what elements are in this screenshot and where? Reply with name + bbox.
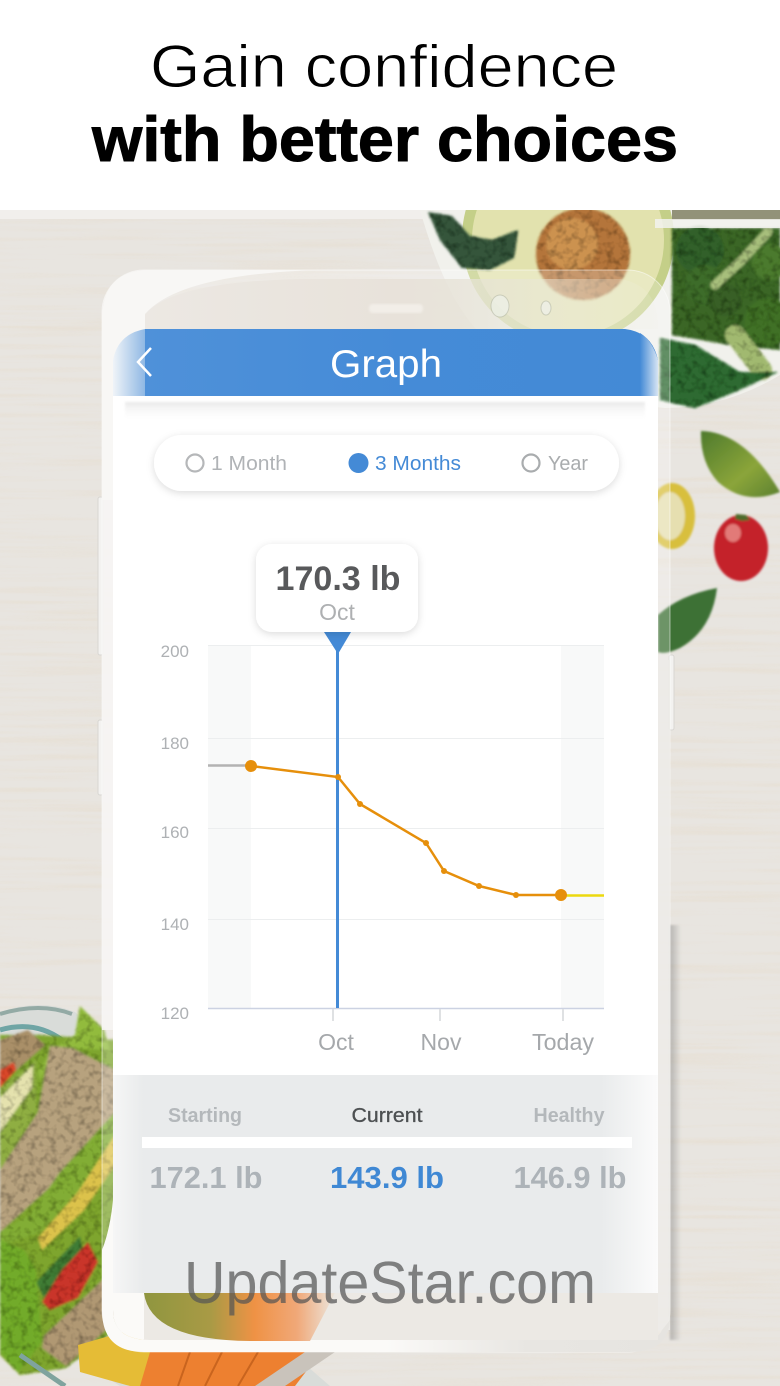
start weight segment [208, 764, 251, 767]
stat: starting [150, 1105, 262, 1195]
divider bar [142, 1137, 632, 1148]
chart side bands [208, 645, 604, 1009]
stat: current [330, 1105, 444, 1195]
watermark: UpdateStar.com [184, 1250, 596, 1316]
stat: starting: Starting [168, 1105, 242, 1127]
option: 1 Month: 1 Month [211, 453, 287, 475]
option: Year: Year [548, 453, 588, 475]
y axis labels: 180 [161, 734, 189, 753]
title: with better choices [91, 105, 678, 175]
stat: starting: 172.1 lb [150, 1160, 262, 1195]
y axis labels: 120 [161, 1004, 189, 1023]
food: yellow tomato [649, 483, 695, 549]
water drops [491, 295, 551, 317]
header title: Graph [330, 343, 442, 386]
time range selector [154, 435, 619, 491]
line chart [161, 632, 604, 1055]
y axis labels [161, 642, 189, 1023]
header band [0, 0, 780, 210]
x axis [208, 1008, 604, 1010]
option: Year [522, 453, 588, 475]
y axis labels: 200 [161, 642, 189, 661]
food: red tomato [714, 514, 768, 581]
goal segment [561, 894, 604, 897]
stat: current: 143.9 lb [330, 1160, 444, 1195]
y axis labels: 160 [161, 823, 189, 842]
x axis labels [318, 1029, 595, 1055]
food showing through phone bottom [144, 1293, 335, 1341]
option: 3 Months: 3 Months [375, 453, 461, 475]
x axis labels: Nov [421, 1029, 462, 1055]
title [91, 33, 678, 175]
selected date marker [324, 632, 351, 1008]
food: salad bowl top right [420, 132, 780, 408]
phone drop shadow [670, 925, 681, 1340]
phone top bezel [145, 279, 658, 329]
back arrow [138, 348, 151, 376]
tooltip: 170.3 lb [276, 560, 400, 598]
y axis labels: 140 [161, 915, 189, 934]
food: green leaf [658, 588, 717, 653]
stat: healthy [514, 1105, 626, 1195]
stat: healthy: 146.9 lb [514, 1160, 626, 1195]
tooltip: Oct [319, 599, 355, 625]
food: basil leaf [701, 431, 780, 497]
screen background [113, 396, 658, 1076]
header bar [113, 329, 658, 422]
x axis labels: Oct [318, 1029, 354, 1055]
tooltip [256, 544, 418, 632]
weight line [245, 760, 567, 901]
phone body [102, 270, 670, 1352]
speaker slot [369, 304, 423, 313]
stat: current: Current [352, 1105, 423, 1127]
stat: healthy: Healthy [534, 1105, 605, 1127]
stats panel [113, 1075, 658, 1341]
title: Gain confidence [150, 33, 618, 100]
x axis labels: Today [532, 1029, 595, 1055]
phone side buttons [98, 497, 674, 795]
food: sandwich bottom left [0, 1005, 335, 1386]
